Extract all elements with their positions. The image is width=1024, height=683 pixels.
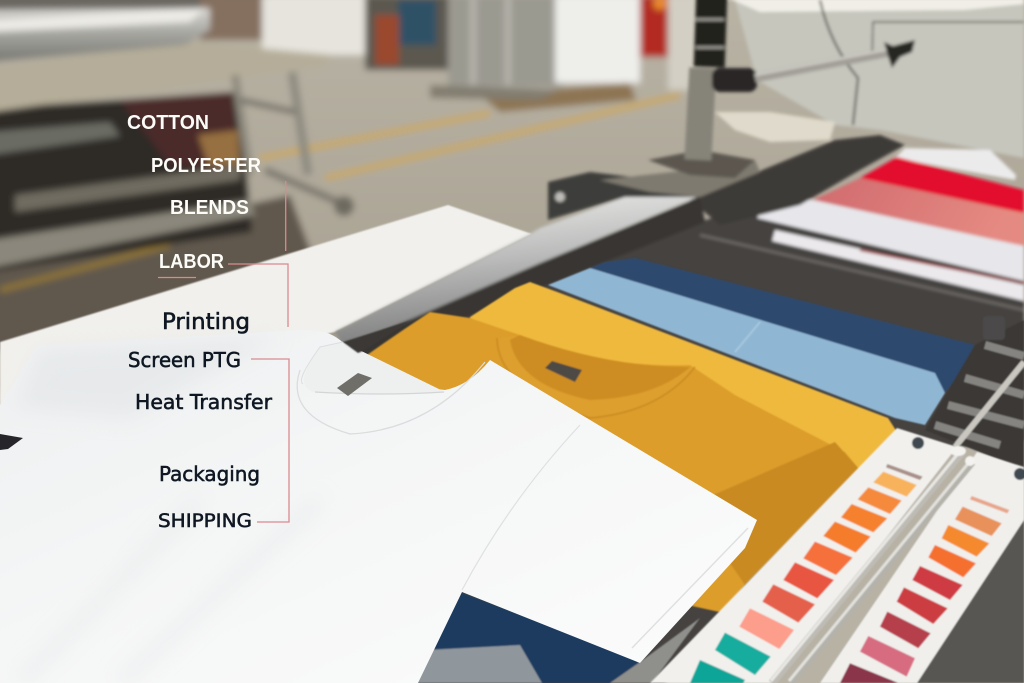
mustard shirt bbox=[360, 312, 860, 613]
label: screen PTG: Screen PTG bbox=[128, 348, 241, 372]
label: blends: BLENDS bbox=[170, 197, 249, 219]
navy shirt bbox=[590, 258, 975, 397]
white t-shirt bbox=[0, 330, 757, 683]
panel: left swatch strip bbox=[650, 428, 957, 683]
label: labor: LABOR bbox=[159, 251, 225, 273]
colour swatch panels bbox=[650, 428, 1024, 683]
shirt edge label bbox=[0, 434, 23, 450]
dark machine corner bbox=[917, 515, 1024, 683]
dark space behind white collar bbox=[343, 320, 412, 353]
white work table bbox=[0, 205, 532, 410]
metal rods bbox=[771, 446, 975, 683]
connector lines bbox=[158, 181, 289, 522]
floor yellow stripes bbox=[0, 95, 680, 290]
back wall and racks bbox=[0, 0, 698, 112]
label: heat transfer: Heat Transfer bbox=[135, 390, 273, 414]
label: shipping: SHIPPING bbox=[158, 510, 252, 532]
labels: production bbox=[128, 310, 273, 532]
mustard shirt neck tag bbox=[545, 361, 582, 382]
fabric sheets bbox=[345, 148, 1024, 683]
clamp post and arm bbox=[684, 0, 915, 161]
light blue shirt bbox=[548, 268, 945, 425]
printer machinery bbox=[335, 0, 1024, 683]
stacked t-shirts bbox=[360, 258, 975, 683]
label: printing: Printing bbox=[162, 310, 250, 335]
back-left table and shelves bbox=[0, 8, 354, 272]
under-sleeve dark fabric bbox=[400, 585, 645, 683]
dark beam and bracket bbox=[335, 135, 905, 360]
white shirt neck tag bbox=[337, 373, 372, 396]
label: cotton: COTTON bbox=[127, 112, 209, 134]
yellow shirt bbox=[470, 282, 897, 480]
panel: right swatch strip bbox=[820, 452, 1024, 683]
background: blurred factory floor bbox=[0, 0, 1024, 390]
machine housing bbox=[735, 0, 1024, 158]
label: polyester: POLYESTER bbox=[151, 155, 262, 177]
label: packaging: Packaging bbox=[159, 462, 260, 486]
labels: materials bbox=[127, 112, 262, 273]
roller bed bbox=[925, 316, 1024, 470]
